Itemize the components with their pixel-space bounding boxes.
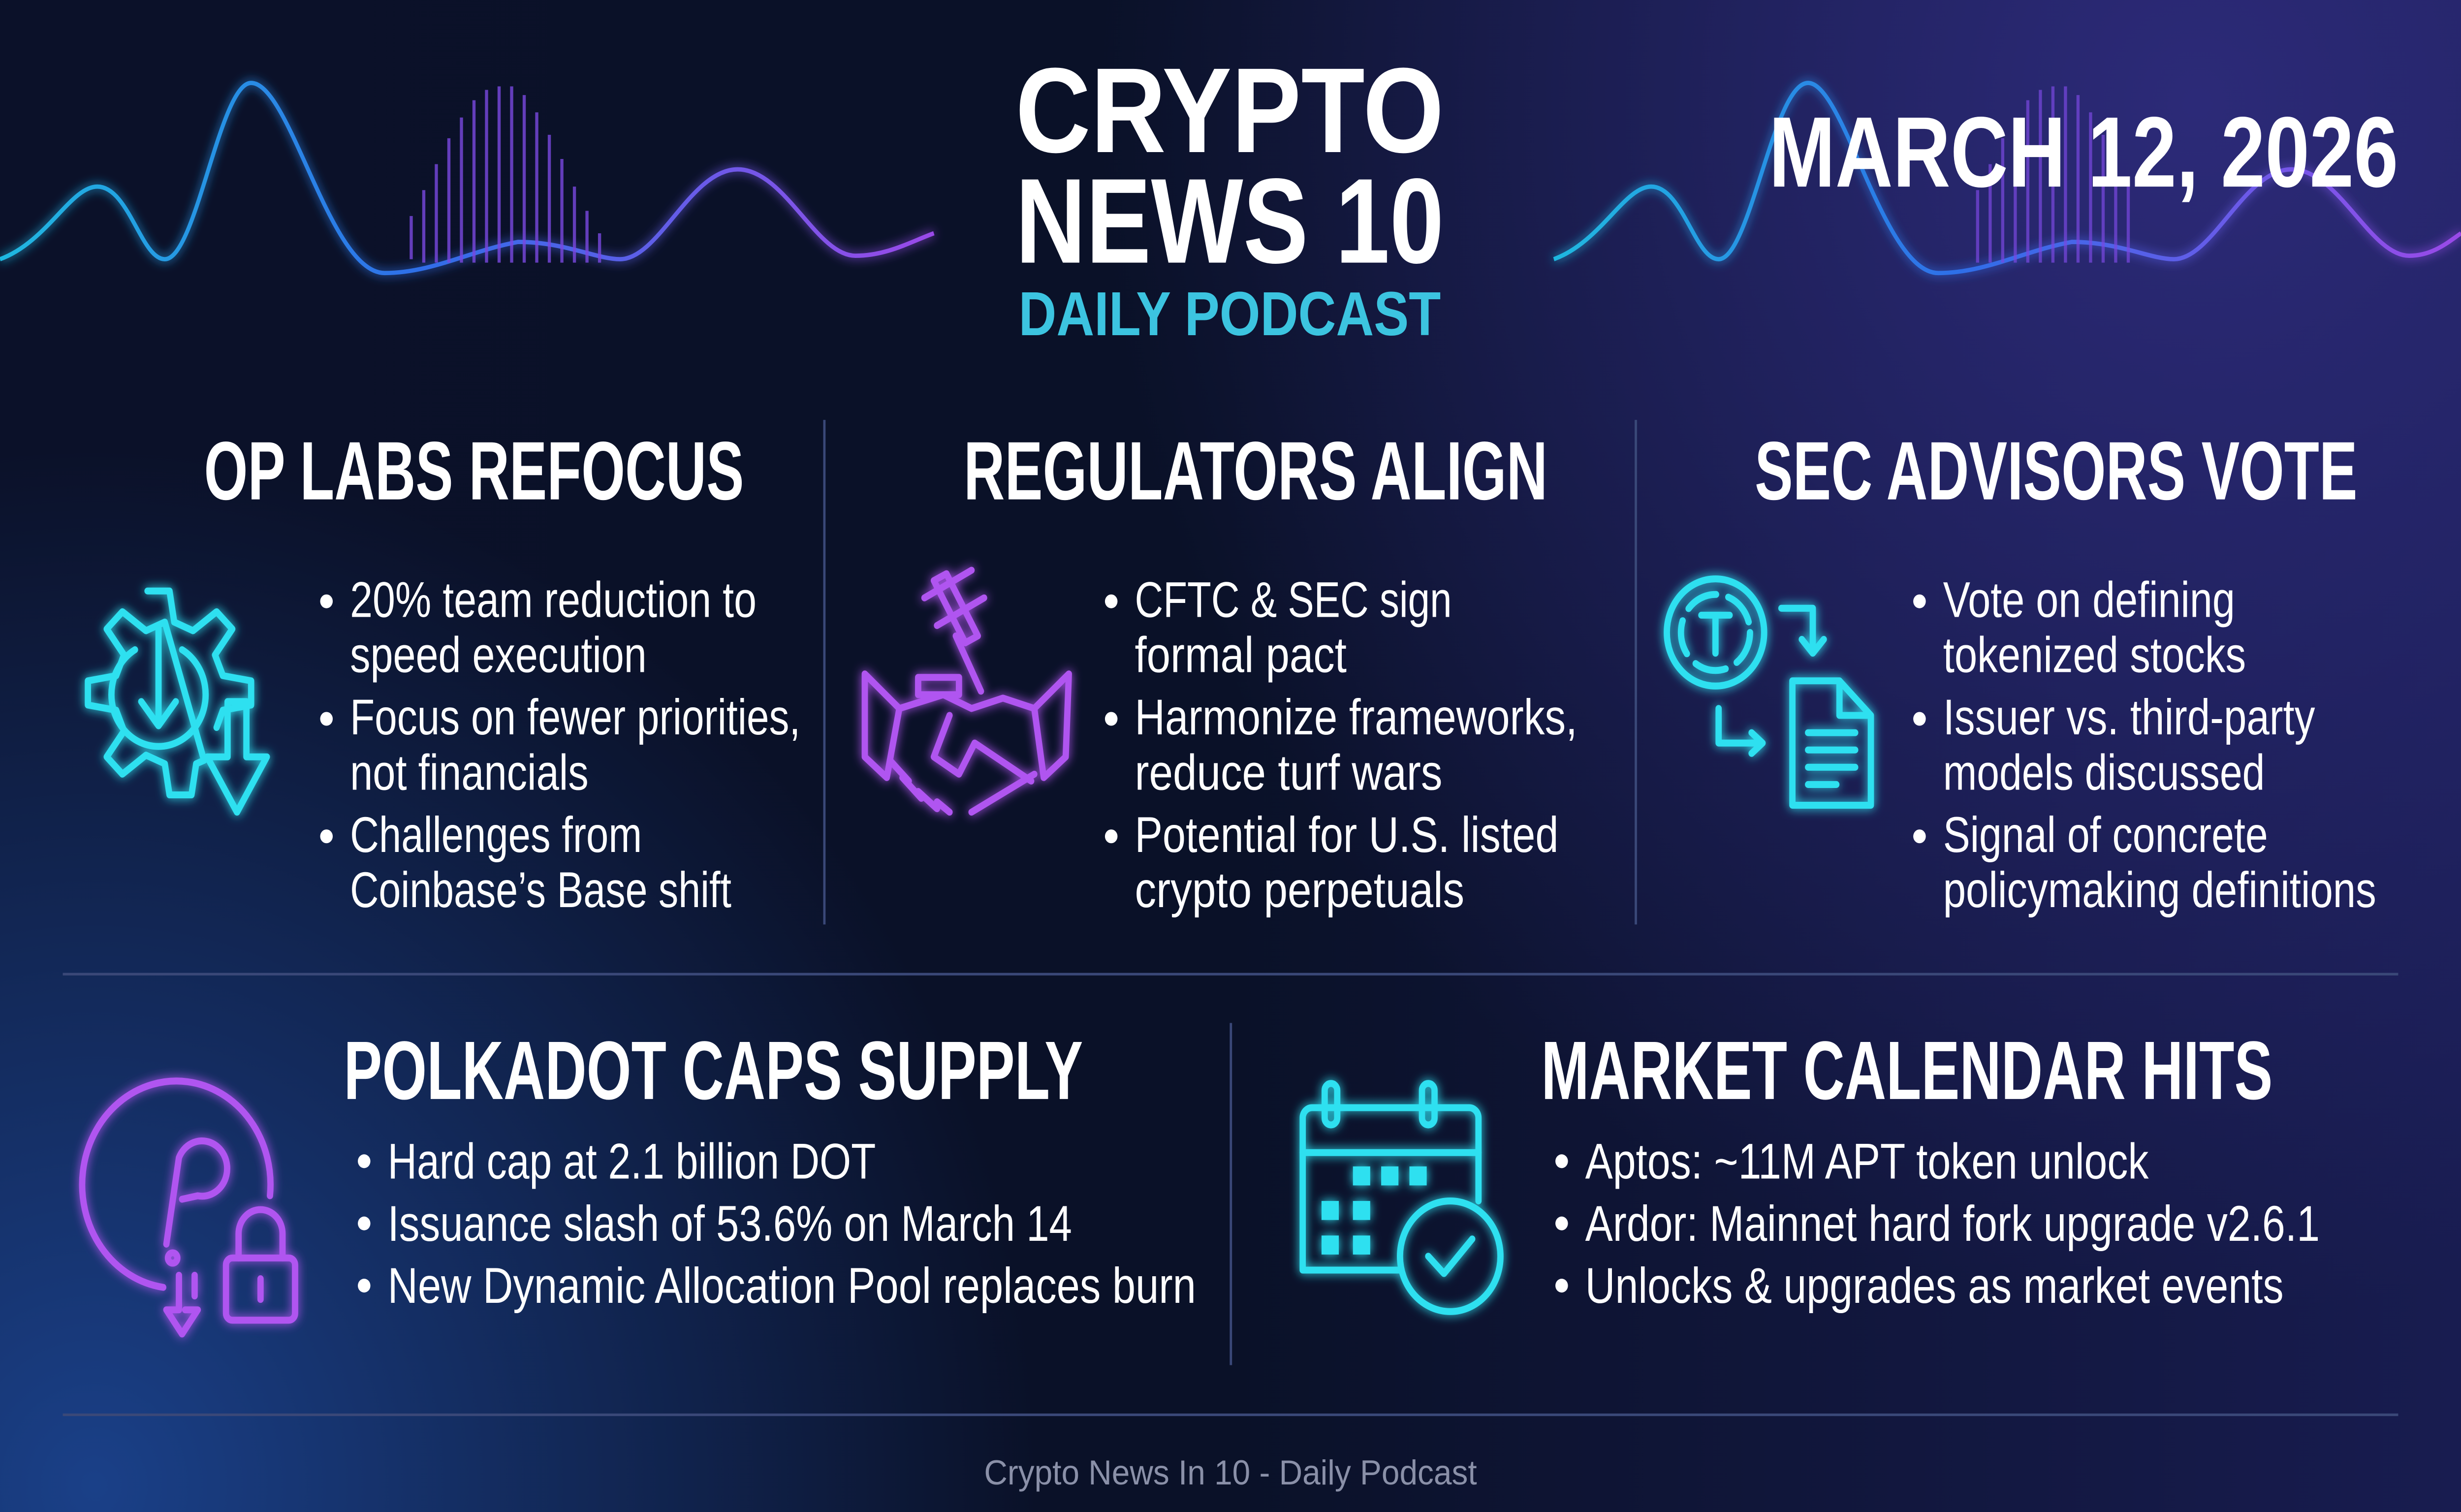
bullets: sec advisors bbox=[1913, 571, 2376, 918]
bullets: sec advisors: policymaking definitions bbox=[1943, 862, 2376, 918]
bullets: op labs: not financials bbox=[350, 744, 589, 800]
heading: regulators: REGULATORS ALIGN bbox=[964, 425, 1547, 517]
panel: market calendar bbox=[1303, 1024, 2320, 1314]
bullets: regulators: formal pact bbox=[1135, 627, 1347, 683]
waves right bbox=[1554, 83, 2461, 273]
bullets: market calendar: Ardor: Mainnet hard fork upgrade v2.6.1 bbox=[1585, 1196, 2320, 1252]
icon: polkadot lock bbox=[82, 1081, 295, 1334]
bullets: polkadot bbox=[358, 1133, 1196, 1314]
bullets: sec advisors: models discussed bbox=[1943, 744, 2265, 800]
title bbox=[1015, 42, 1444, 288]
dividers bbox=[63, 420, 2398, 1416]
bullets: polkadot: Hard cap at 2.1 billion DOT bbox=[388, 1133, 876, 1189]
icon: gear download bbox=[88, 591, 267, 812]
bullets: op labs: Challenges from bbox=[350, 807, 642, 863]
bullets: regulators: CFTC & SEC sign bbox=[1135, 571, 1452, 628]
bullets: regulators: Harmonize frameworks, bbox=[1135, 689, 1578, 745]
bullets: regulators bbox=[1105, 571, 1578, 918]
bullets: regulators: reduce turf wars bbox=[1135, 744, 1442, 800]
bullets: regulators: crypto perpetuals bbox=[1135, 862, 1464, 918]
heading: polkadot: POLKADOT CAPS SUPPLY bbox=[344, 1024, 1083, 1117]
bullets: polkadot: Issuance slash of 53.6% on March 14 bbox=[388, 1196, 1072, 1252]
panel: polkadot bbox=[82, 1024, 1196, 1334]
subtitle: DAILY PODCAST bbox=[1019, 279, 1441, 348]
bullets: sec advisors: Vote on defining bbox=[1943, 571, 2235, 628]
title: NEWS 10 bbox=[1015, 153, 1444, 288]
bullets: sec advisors: Issuer vs. third-party bbox=[1943, 689, 2315, 745]
panel: sec advisors bbox=[1667, 425, 2376, 918]
panel: regulators bbox=[865, 425, 1578, 918]
waves left bbox=[0, 83, 934, 273]
bullets: polkadot: New Dynamic Allocation Pool replaces burn bbox=[388, 1258, 1196, 1314]
bullets: op labs: Focus on fewer priorities, bbox=[350, 689, 800, 745]
icon: gavel handshake bbox=[865, 570, 1069, 812]
bullets: regulators: Potential for U.S. listed bbox=[1135, 807, 1558, 863]
bullets: op labs bbox=[320, 571, 800, 918]
bullets: market calendar: Aptos: ~11M APT token unlock bbox=[1585, 1133, 2149, 1189]
footer: Crypto News In 10 - Daily Podcast bbox=[984, 1453, 1477, 1492]
icon: calendar check bbox=[1303, 1083, 1500, 1312]
bullets: op labs: 20% team reduction to bbox=[350, 571, 757, 628]
bullets: sec advisors: tokenized stocks bbox=[1943, 627, 2246, 683]
bullets: market calendar: Unlocks & upgrades as market events bbox=[1585, 1258, 2284, 1314]
panel: op labs bbox=[88, 425, 800, 918]
bullets: market calendar bbox=[1555, 1133, 2320, 1314]
bullets: op labs: Coinbase’s Base shift bbox=[350, 862, 731, 918]
title: CRYPTO bbox=[1015, 42, 1444, 178]
bullets: op labs: speed execution bbox=[350, 627, 647, 683]
bullets: sec advisors: Signal of concrete bbox=[1943, 807, 2268, 863]
heading: op labs: OP LABS REFOCUS bbox=[204, 425, 744, 517]
icon: token document bbox=[1667, 579, 1871, 805]
